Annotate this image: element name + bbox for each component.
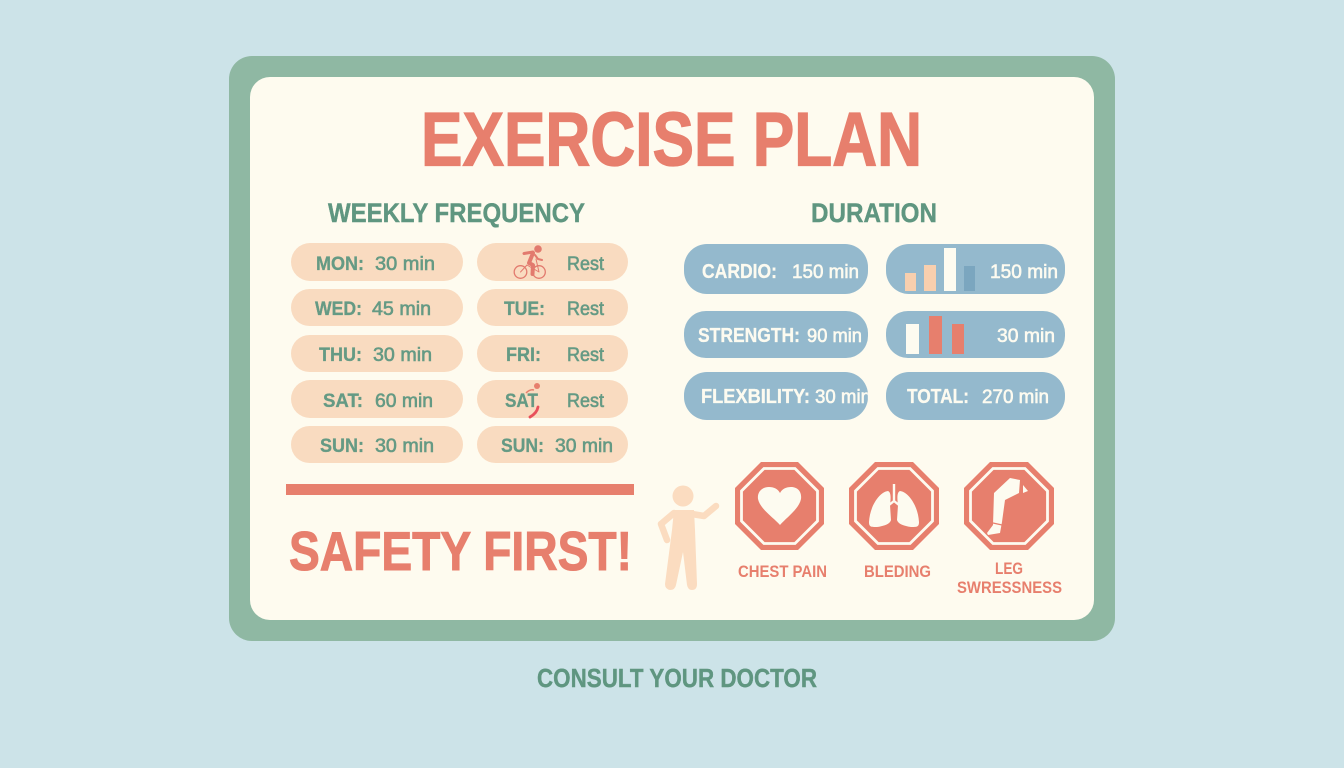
heading: weekly frequency: WEEKLY FREQUENCY [328,198,585,228]
panel: weekly frequency pills [291,243,628,463]
pill: flexibility: FLEXBILITY: [701,386,810,408]
icon: stop sign with lungs [849,462,939,550]
pill: cardio: 150 min [792,261,859,283]
warning: leg swelling: LEG [995,559,1023,578]
warning: chest pain [735,462,827,581]
pill: Saturday [291,380,463,418]
divider bar [286,484,634,495]
icon: runner fragment [526,383,540,417]
pill: Thursday: THU: [319,345,362,366]
bar chart: cardio [905,248,975,291]
pill: Saturday rest: SAT [505,391,538,412]
icon: stop sign with leg [964,462,1054,550]
pill: flexibility: 30 min [815,386,871,408]
pill: Saturday rest [477,380,628,418]
pill: Tuesday: TUE: [504,299,545,320]
pill: cardio bars: 150 min [990,261,1058,283]
warning: leg swelling: SWRESSNESS [957,578,1062,597]
pill: Wednesday: 45 min [372,299,431,320]
pill: total [886,372,1065,420]
title: EXERCISE PLAN [421,98,922,182]
heading: duration: DURATION [811,198,937,228]
warning: bleeding [849,462,939,581]
heading: safety first: SAFETY FIRST! [289,520,632,582]
pill: strength [684,311,868,358]
pill: strength bars [886,311,1065,358]
pill: total: 270 min [982,386,1049,408]
warning: chest pain: CHEST PAIN [738,562,827,581]
pill: Wednesday [291,289,463,326]
panel: green frame [229,56,1115,641]
pill: flexibility [684,372,871,420]
pill: cardio [684,244,868,294]
footer note: CONSULT YOUR DOCTOR [537,663,817,693]
panel: duration pills [684,244,1065,420]
pill: Monday [291,243,463,281]
pill: strength: STRENGTH: [698,325,800,347]
panel: cream card [250,77,1094,620]
pill: cycling rest: Rest [567,254,605,275]
pill: Sunday: 30 min [375,436,434,457]
pill: Saturday rest: Rest [567,391,605,412]
pill: Sunday second: SUN: [501,436,544,457]
warning: leg swelling [957,462,1062,597]
pill: Sunday: SUN: [320,436,364,457]
pill: Wednesday: WED: [315,299,362,320]
pill: Tuesday [477,289,628,326]
pill: Friday [477,335,628,372]
pill: Tuesday: Rest [567,299,605,320]
icon: pointing person [661,486,716,590]
pill: Friday: Rest [567,345,605,366]
pill: Saturday: 60 min [375,391,433,412]
pill: Thursday: 30 min [373,345,432,366]
warning: bleeding: BLEDING [864,562,931,581]
icon: cyclist [514,245,545,278]
bar chart: strength [906,316,964,354]
icon: stop sign with heart [735,462,824,550]
pill: cardio: CARDIO: [702,261,777,283]
pill: Sunday [291,426,463,463]
pill: Sunday second: 30 min [555,436,613,457]
pill: total: TOTAL: [907,386,969,408]
pill: Monday: MON: [316,254,364,275]
pill: strength bars: 30 min [997,325,1055,347]
pill: Saturday: SAT: [323,391,363,412]
pill: cycling rest [477,243,628,281]
pill: strength: 90 min [807,325,862,347]
pill: Friday: FRI: [506,345,541,366]
pill: Sunday second [477,426,628,463]
pill: cardio bars [886,244,1065,294]
pill: Monday: 30 min [375,254,435,275]
pill: Thursday [291,335,463,372]
